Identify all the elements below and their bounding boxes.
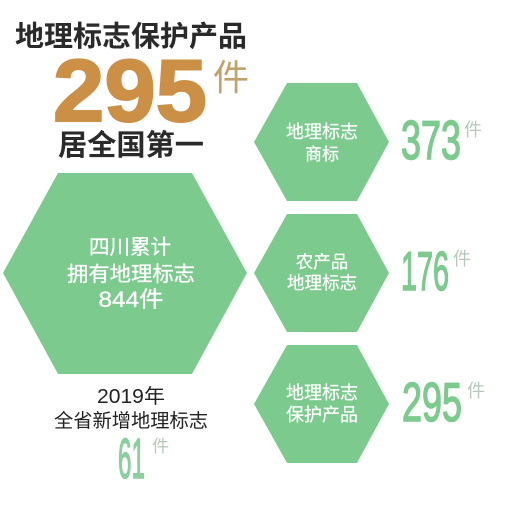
large hexagon text (67, 236, 195, 312)
hexagon protected text (286, 383, 358, 425)
stat 295: 件 (467, 381, 485, 401)
stat 61: 61 (118, 427, 145, 491)
stat 295: 295 (402, 371, 462, 433)
big number unit: 件 (213, 57, 249, 98)
new additions label: 全省新增地理标志 (54, 410, 208, 432)
hexagon agricultural text: 农产品 (296, 252, 348, 272)
panel: hexagon protected (254, 345, 389, 463)
hexagon trademark text: 地理标志 (286, 122, 358, 142)
stat 176: 件 (453, 249, 471, 269)
new additions label: 2019年 (97, 385, 165, 408)
large hexagon text: 四川累计 (89, 236, 171, 259)
new additions label (54, 385, 208, 432)
panel: large hexagon (3, 173, 247, 374)
hexagon trademark text (286, 122, 358, 164)
big number 295: 295 (53, 41, 207, 140)
panel: hexagon agricultural (254, 214, 389, 332)
hexagon agricultural text: 地理标志 (287, 273, 357, 293)
stat 373: 件 (464, 120, 482, 140)
hexagon trademark text: 商标 (305, 145, 339, 164)
hexagon protected text: 地理标志 (286, 383, 358, 403)
title: 地理标志保护产品 (15, 21, 247, 53)
subtitle: 居全国第一 (58, 129, 204, 162)
large hexagon text: 844件 (98, 287, 164, 312)
stat 176: 176 (401, 240, 449, 302)
stat 61: 件 (152, 437, 169, 456)
stat 373: 373 (401, 109, 461, 171)
panel: hexagon trademark (254, 83, 389, 201)
hexagon agricultural text (287, 252, 357, 293)
hexagon protected text: 保护产品 (286, 405, 358, 425)
large hexagon text: 拥有地理标志 (67, 263, 195, 286)
